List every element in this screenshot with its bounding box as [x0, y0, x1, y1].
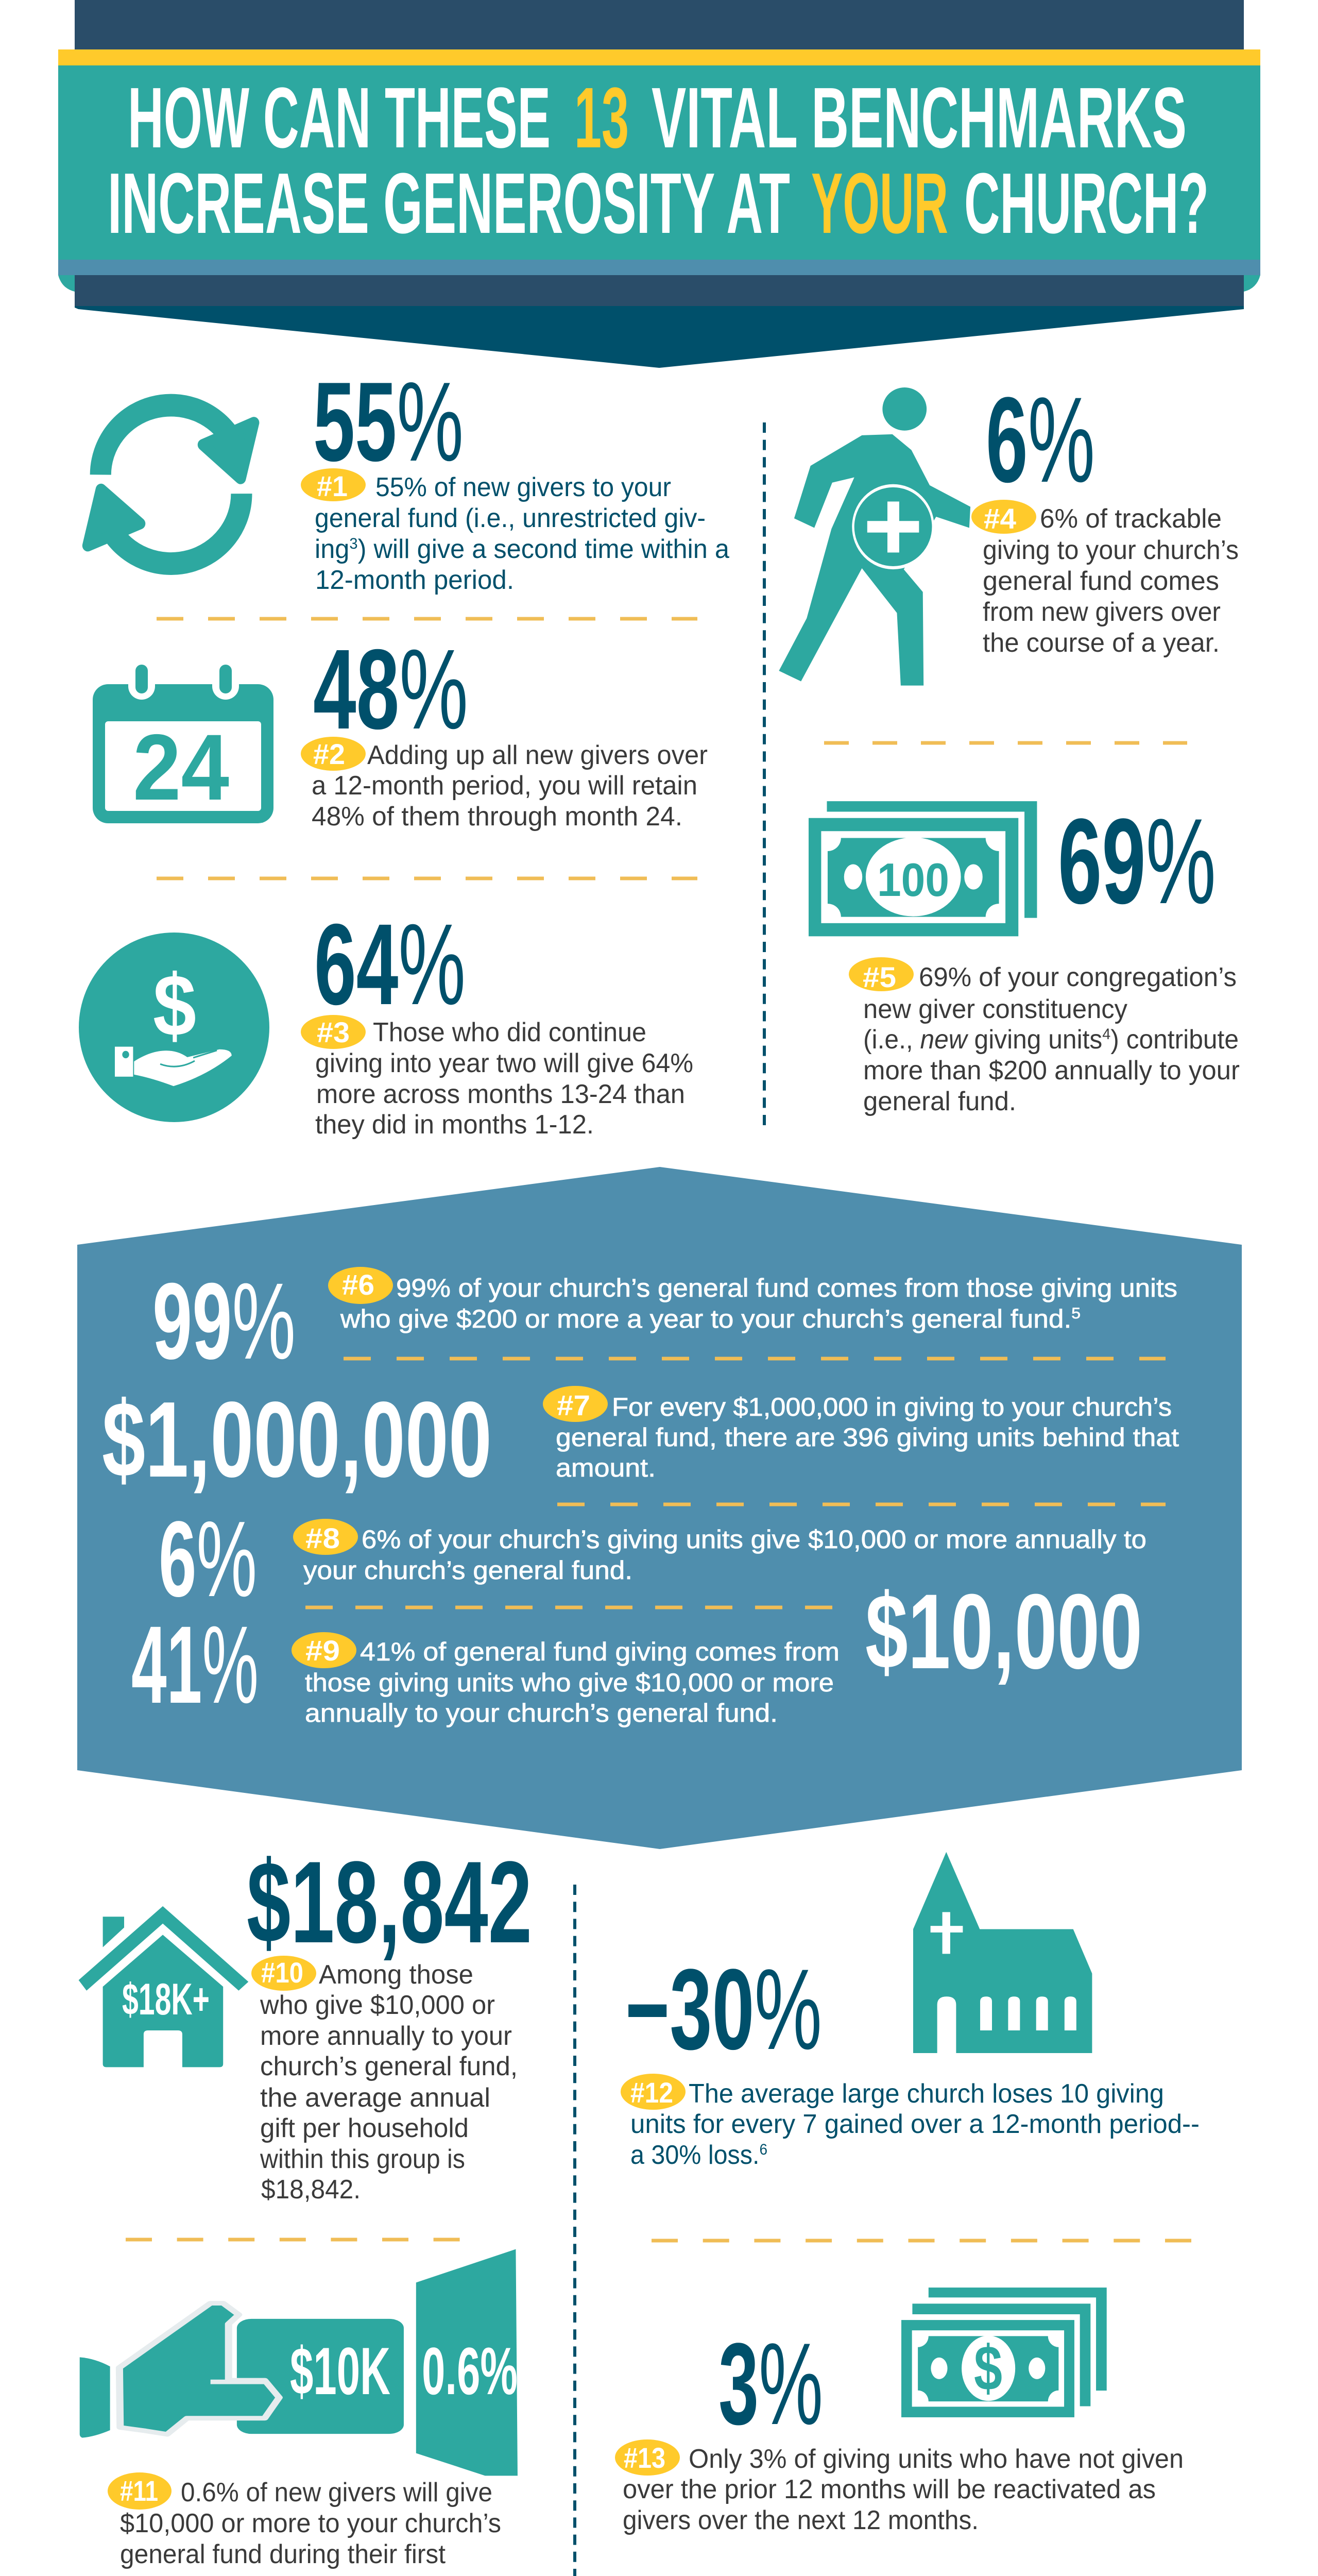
- text: benchmark 2: 48% of them through month 24.: [312, 802, 682, 832]
- badge: #8: #8: [305, 1522, 340, 1554]
- badge: #6: #6: [342, 1268, 374, 1301]
- text: benchmark 10: church’s general fund,: [260, 2052, 518, 2081]
- badge: #7: #7: [557, 1389, 590, 1421]
- text: benchmark 4: the course of a year.: [983, 628, 1220, 658]
- icon: circular arrows: [88, 405, 254, 564]
- text: benchmark 9: annually to your church’s general fund.: [305, 1699, 778, 1727]
- text: benchmark 1: 3: [349, 535, 358, 552]
- text: benchmark 10: within this group is: [260, 2144, 465, 2174]
- text: benchmark 12: The average large church loses 10 giving: [689, 2079, 1164, 2109]
- badge: #11: #11: [120, 2475, 158, 2507]
- panel: benchmark 12: [621, 1852, 1200, 2170]
- badge: #7: [543, 1386, 608, 1422]
- text: benchmark 3: [315, 1018, 693, 1140]
- text: benchmark 10: gift per household: [260, 2113, 469, 2143]
- title: YOUR: [811, 156, 948, 251]
- text: benchmark 6: 5: [1071, 1305, 1081, 1322]
- text: benchmark 12: 6: [759, 2141, 767, 2158]
- badge: #5: #5: [863, 961, 896, 993]
- panel: benchmark 2: [93, 625, 708, 832]
- panel: benchmark 1: [88, 359, 729, 595]
- stat: 3%: 3%: [718, 2318, 823, 2449]
- text: benchmark 1: 12-month period.: [315, 565, 514, 595]
- icon: calendar: [93, 663, 273, 823]
- badge: #11: [108, 2472, 172, 2510]
- text: benchmark 13: Only 3% of giving units who have not given: [689, 2444, 1184, 2474]
- text: benchmark 13: over the prior 12 months will be reactivated as: [623, 2475, 1156, 2504]
- text: benchmark 1: ing: [315, 534, 350, 564]
- text: benchmark 2: a 12-month period, you will retain: [312, 771, 697, 801]
- icon: hand giving card: [80, 2249, 518, 2476]
- text: benchmark 3: Those who did continue: [373, 1018, 646, 1047]
- stat: $1,000,000: $1,000,000: [102, 1380, 492, 1500]
- badge: #12: [621, 2074, 686, 2110]
- icon: banknotes 100: [809, 801, 1037, 936]
- text: benchmark 10: more annually to your: [260, 2021, 512, 2051]
- text: benchmark 10: Among those: [319, 1960, 473, 1990]
- stat: 64%: 64%: [314, 900, 466, 1029]
- stat: -30%: −30%: [625, 1945, 822, 2074]
- text: benchmark 13: givers over the next 12 months.: [623, 2505, 979, 2535]
- text: benchmark 1: general fund (i.e., unrestricted giv-: [315, 503, 706, 533]
- text: benchmark 7: amount.: [556, 1453, 656, 1482]
- text: benchmark 5: 4: [1102, 1026, 1110, 1043]
- icon: house $18K+: $18K+: [122, 1975, 210, 2024]
- panel: benchmark 11: [80, 2249, 518, 2576]
- text: benchmark 10: the average annual: [260, 2083, 490, 2113]
- text: benchmark 2: [312, 740, 708, 832]
- icon: hand with dollar: [79, 933, 269, 1122]
- text: benchmark 9: those giving units who give $10,000 or more: [305, 1668, 834, 1697]
- text: benchmark 1: 55% of new givers to your: [375, 472, 671, 502]
- badge: #13: [615, 2439, 680, 2476]
- text: benchmark 10: who give $10,000 or: [260, 1990, 495, 2020]
- icon: walking person with plus: [779, 387, 970, 686]
- text: benchmark 13: [623, 2444, 1184, 2535]
- text: benchmark 12: [630, 2079, 1200, 2170]
- badge: #3: #3: [317, 1016, 350, 1048]
- stat: 6%: 6%: [159, 1499, 257, 1619]
- badge: #10: #10: [261, 1956, 303, 1989]
- text: benchmark 3: more across months 13-24 than: [316, 1079, 685, 1109]
- badge: #2: #2: [313, 738, 345, 770]
- text: benchmark 5: more than $200 annually to your: [863, 1056, 1240, 1086]
- panel: blue benchmarks 6-9: [77, 1167, 1242, 1849]
- text: benchmark 7: [556, 1393, 1179, 1482]
- text: benchmark 4: [983, 504, 1239, 658]
- stat: 41%: 41%: [131, 1603, 259, 1726]
- text: benchmark 6: [340, 1274, 1177, 1333]
- badge: #1: [301, 468, 366, 502]
- panel: benchmark 13: [615, 2287, 1184, 2535]
- divider: lower vertical dashed line: [573, 1885, 576, 2576]
- text: benchmark 8: [303, 1525, 1146, 1585]
- text: benchmark 11: [119, 2478, 501, 2576]
- text: benchmark 9: 41% of general fund giving comes from: [360, 1637, 840, 1666]
- badge: #10: [251, 1956, 316, 1991]
- stat: $10,000: $10,000: [865, 1572, 1142, 1691]
- text: benchmark 8: your church’s general fund.: [303, 1556, 632, 1585]
- text: benchmark 5: ) contribute: [1110, 1025, 1239, 1055]
- icon: banknotes 100: 100: [877, 854, 949, 906]
- text: benchmark 1: ) will give a second time within a: [358, 534, 729, 564]
- badge: #6: [328, 1267, 393, 1304]
- badge: #4: [971, 500, 1036, 535]
- text: benchmark 3: giving into year two will give 64%: [315, 1048, 693, 1078]
- panel: benchmark 10: [79, 1837, 532, 2205]
- text: benchmark 6: who give $200 or more a year to your church’s general fund.: [340, 1304, 1027, 1333]
- badge: #13: #13: [624, 2442, 665, 2474]
- text: benchmark 12: a 30% loss.: [630, 2140, 769, 2170]
- text: benchmark 5: general fund.: [863, 1087, 1016, 1116]
- text: benchmark 5: new giver constituency: [863, 994, 1127, 1024]
- title: [108, 70, 1209, 251]
- panel: benchmark 3: [79, 900, 693, 1140]
- text: benchmark 12: units for every 7 gained over a 12-month period--: [630, 2109, 1200, 2139]
- badge: #12: #12: [630, 2076, 673, 2109]
- text: benchmark 11: $10,000 or more to your church’s: [120, 2509, 501, 2538]
- text: benchmark 7: For every $1,000,000 in giving to your church’s: [612, 1393, 1172, 1421]
- panel: benchmark 4: [779, 372, 1239, 686]
- text: benchmark 3: they did in months 1-12.: [315, 1110, 594, 1140]
- icon: hand with dollar: $: [153, 957, 196, 1055]
- title: HOW CAN THESE: [128, 70, 551, 166]
- text: benchmark 5: 69% of your congregation’s: [919, 962, 1237, 992]
- badge: #1: #1: [317, 470, 348, 502]
- icon: calendar: 24: [133, 715, 229, 820]
- stat: 55%: 55%: [313, 359, 464, 485]
- stat: 99%: 99%: [152, 1260, 296, 1382]
- divider: top vertical dashed line: [763, 422, 766, 1131]
- icon: hand giving card: 0.6%: [422, 2333, 518, 2409]
- stat: $18,842: $18,842: [247, 1837, 532, 1967]
- text: benchmark 5: [863, 962, 1240, 1116]
- panel: benchmark 5: [809, 793, 1240, 1116]
- badge: #5: [849, 957, 914, 993]
- text: benchmark 4: giving to your church’s: [983, 535, 1239, 565]
- text: benchmark 10: $18,842.: [261, 2175, 361, 2205]
- stat: 6%: 6%: [986, 372, 1095, 508]
- icon: stack of dollar bills: $: [974, 2333, 1002, 2404]
- text: benchmark 1: [315, 472, 729, 595]
- text: benchmark 5: (i.e., new giving units: [863, 1025, 1108, 1055]
- icon: hand giving card: $10K: [290, 2333, 390, 2409]
- icon: church: [913, 1852, 1092, 2053]
- badge: #9: #9: [305, 1634, 340, 1667]
- header banner: [58, 0, 1260, 368]
- badge: #9: [292, 1632, 356, 1668]
- text: benchmark 7: general fund, there are 396 giving units behind that: [556, 1423, 1179, 1452]
- text: benchmark 4: from new givers over: [983, 597, 1221, 627]
- text: benchmark 10: [260, 1960, 518, 2205]
- text: benchmark 11: general fund during their first: [120, 2539, 446, 2569]
- title: 13: [574, 70, 629, 166]
- stat: 69%: 69%: [1058, 793, 1216, 929]
- title: INCREASE GENEROSITY AT: [108, 156, 790, 251]
- badge: #3: [301, 1015, 366, 1049]
- icon: house $18K+: [79, 1906, 248, 2067]
- text: benchmark 6: 99% of your church’s general fund comes from those giving units: [396, 1274, 1177, 1302]
- badge: #4: #4: [984, 502, 1016, 535]
- text: benchmark 4: 6% of trackable: [1040, 504, 1222, 534]
- badge: #8: [293, 1519, 358, 1555]
- text: benchmark 2: Adding up all new givers over: [367, 740, 708, 770]
- icon: stack of dollar bills: [901, 2287, 1107, 2417]
- text: benchmark 11: 0.6% of new givers will give: [181, 2478, 492, 2507]
- badge: #2: [301, 737, 366, 771]
- text: benchmark 4: general fund comes: [983, 566, 1219, 596]
- text: benchmark 8: 6% of your church’s giving units give $10,000 or more annually to: [362, 1525, 1146, 1554]
- text: benchmark 9: [305, 1637, 840, 1727]
- stat: 48%: 48%: [313, 625, 468, 753]
